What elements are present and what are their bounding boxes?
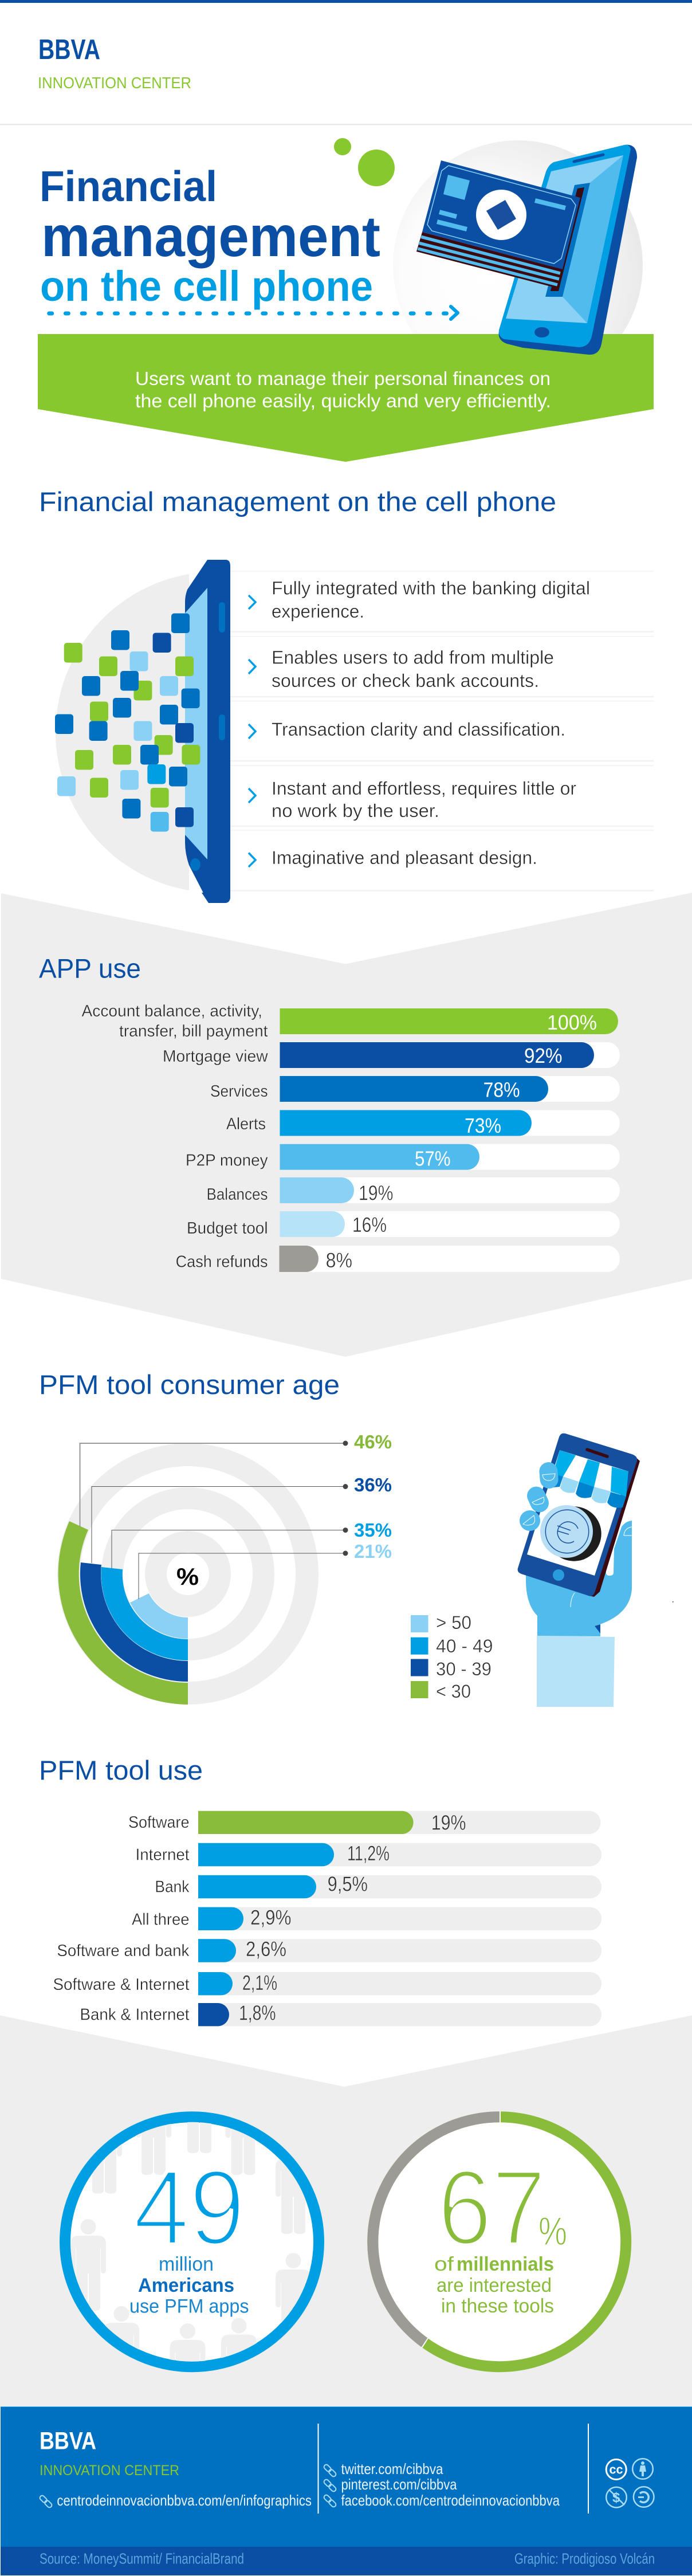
legend bbox=[411, 1612, 493, 1702]
bar: software bbox=[128, 1811, 601, 1835]
stat circle: 67 percent bbox=[373, 2111, 626, 2367]
bar: balances: Balances bbox=[206, 1185, 268, 1204]
arrow: dotted bbox=[49, 307, 458, 319]
caption bbox=[129, 2253, 249, 2317]
bar: cash refunds bbox=[176, 1246, 620, 1272]
callout: 36% bbox=[92, 1474, 392, 1563]
list item 1: Fully integrated with the banking digital bbox=[272, 578, 590, 598]
bar: software and bank: Software and bank bbox=[57, 1942, 190, 1960]
caption: are interested bbox=[437, 2275, 552, 2296]
panel: key stats bbox=[0, 2016, 692, 2415]
bar: alerts: 73% bbox=[465, 1114, 501, 1137]
footer background bbox=[1, 2407, 692, 2547]
bar: account balance: Account balance, activity, bbox=[81, 1002, 262, 1020]
callout: 46%: 46% bbox=[354, 1431, 392, 1452]
title: management bbox=[41, 205, 380, 269]
bar: bank: Bank bbox=[155, 1878, 190, 1896]
bar: bank and internet bbox=[80, 2001, 601, 2026]
bar: all three: All three bbox=[132, 1911, 189, 1929]
bar: software and bank: 2,6% bbox=[246, 1937, 286, 1961]
callout: 36%: 36% bbox=[354, 1474, 392, 1495]
bar: services: Services bbox=[210, 1082, 268, 1101]
bar chart: APP use bbox=[81, 1002, 620, 1272]
bar: budget tool: Budget tool bbox=[187, 1219, 268, 1238]
hero section bbox=[38, 138, 654, 462]
big number 49: 49 bbox=[133, 2149, 245, 2267]
logo: BBVA Innovation Center: BBVA bbox=[38, 34, 100, 65]
bar: balances bbox=[206, 1177, 620, 1205]
social links: facebook.com/centrodeinnovacionbbva bbox=[341, 2492, 560, 2509]
bar: bank and internet: Bank & Internet bbox=[80, 2006, 189, 2024]
bar: budget tool bbox=[187, 1211, 620, 1238]
banner: green arrow: Users want to manage their personal finances on bbox=[135, 368, 551, 389]
panel background bbox=[0, 2016, 692, 2407]
list item 2: Enables users to add from multiple bbox=[272, 647, 554, 668]
backdrop half circle bbox=[56, 574, 189, 890]
percent sign: % bbox=[538, 2209, 567, 2253]
caption: of bbox=[434, 2253, 454, 2275]
bar: services bbox=[210, 1076, 620, 1102]
top bar bbox=[0, 0, 692, 3]
footer logo: INNOVATION CENTER bbox=[40, 2463, 179, 2479]
list item 2: sources or check bank accounts. bbox=[272, 670, 539, 691]
icon: tablet side bbox=[185, 560, 230, 903]
panel: features bbox=[55, 560, 654, 903]
caption: use PFM apps bbox=[129, 2295, 249, 2317]
bar: software and bank bbox=[57, 1937, 601, 1962]
bar: software and internet bbox=[53, 1971, 601, 1995]
legend: < 30 bbox=[436, 1681, 471, 1702]
icons: creative commons licence: $ bbox=[612, 2490, 620, 2506]
bar: alerts bbox=[226, 1110, 620, 1137]
website link: centrodeinnovacionbbva.com/en/infographics bbox=[57, 2492, 312, 2509]
bar: software and internet: 2,1% bbox=[242, 1971, 277, 1994]
bar: account balance bbox=[81, 1002, 618, 1040]
source bar background bbox=[1, 2547, 692, 2575]
callout: 35% bbox=[112, 1519, 392, 1569]
list item 3: Transaction clarity and classification. bbox=[272, 719, 565, 740]
chart: concentric rings bbox=[58, 1431, 392, 1705]
logo: BBVA Innovation Center: INNOVATION CENTER bbox=[38, 74, 191, 92]
banner: green arrow bbox=[38, 334, 654, 462]
stat circle: 49 million bbox=[60, 2111, 324, 2372]
bar: budget tool: 16% bbox=[352, 1213, 387, 1236]
ring: under 30 bbox=[58, 1521, 188, 1705]
bar: P2P money: P2P money bbox=[186, 1152, 268, 1170]
icon: data squares bbox=[55, 613, 200, 832]
bar: bank: 9,5% bbox=[328, 1872, 368, 1896]
icon: phone with card bbox=[416, 145, 637, 355]
caption: in these tools bbox=[441, 2295, 554, 2317]
tablet tip overlapping panel bbox=[202, 893, 230, 903]
bar: services: 78% bbox=[483, 1078, 520, 1102]
caption: million bbox=[159, 2253, 214, 2275]
title: on the cell phone bbox=[40, 262, 373, 310]
bar: account balance: 100% bbox=[547, 1011, 597, 1034]
title bbox=[40, 162, 380, 310]
banner: green arrow: the cell phone easily, quickly and very efficiently. bbox=[135, 390, 551, 411]
people pattern bbox=[70, 2078, 311, 2415]
title: Financial bbox=[40, 162, 217, 210]
list item 2 bbox=[249, 647, 554, 691]
list item 4: no work by the user. bbox=[272, 800, 439, 821]
center percent sign: % bbox=[176, 1563, 199, 1590]
bar: cash refunds: 8% bbox=[326, 1248, 352, 1272]
icon: green dots bbox=[334, 138, 395, 186]
ring: 30 to 39 bbox=[80, 1562, 188, 1682]
bar: balances: 19% bbox=[359, 1181, 393, 1205]
social links bbox=[323, 2460, 560, 2509]
bar: account balance: transfer, bill payment bbox=[119, 1022, 268, 1040]
callout: 46% bbox=[80, 1431, 392, 1527]
bar: bank and internet: 1,8% bbox=[239, 2001, 276, 2025]
list item 1: experience. bbox=[272, 601, 364, 622]
panel: footer bbox=[1, 2406, 692, 2575]
caption: millennials bbox=[457, 2253, 554, 2275]
heading: PFM tool use: PFM tool use bbox=[39, 1756, 203, 1786]
caption: Americans bbox=[138, 2275, 234, 2296]
panel background bbox=[1, 893, 692, 1357]
social links: pinterest.com/cibbva bbox=[341, 2476, 457, 2493]
list item 4: Instant and effortless, requires little or bbox=[272, 778, 576, 799]
bar: mortgage view: Mortgage view bbox=[163, 1047, 269, 1066]
panel: APP use bbox=[1, 893, 692, 1357]
ring: over 50 bbox=[130, 1593, 188, 1639]
callout: 21%: 21% bbox=[354, 1541, 392, 1562]
bar: bank bbox=[155, 1872, 601, 1898]
bar: internet: 11,2% bbox=[347, 1841, 390, 1865]
legend: 30 - 39 bbox=[436, 1659, 492, 1679]
bar: software: Software bbox=[128, 1813, 189, 1832]
footer logo: BBVA bbox=[40, 2428, 96, 2455]
callout: 35%: 35% bbox=[354, 1519, 392, 1541]
hero backdrop circle bbox=[393, 140, 643, 390]
icons: creative commons licence bbox=[606, 2459, 654, 2508]
footer logo bbox=[40, 2428, 179, 2479]
bar: P2P money bbox=[186, 1144, 620, 1170]
list item 4 bbox=[249, 778, 576, 821]
bar: alerts: Alerts bbox=[226, 1115, 266, 1133]
bar: all three bbox=[132, 1906, 601, 1930]
bar: internet bbox=[135, 1841, 601, 1866]
icons: creative commons licence: cc bbox=[610, 2463, 623, 2476]
heading: financial management: Financial management on the cell phone bbox=[39, 487, 556, 517]
bar: software and internet: Software & Internet bbox=[53, 1976, 189, 1994]
legend: > 50 bbox=[436, 1612, 471, 1633]
social links: twitter.com/cibbva bbox=[341, 2460, 443, 2477]
bar: all three: 2,9% bbox=[250, 1906, 291, 1929]
callout: 21% bbox=[139, 1541, 392, 1599]
big number 67: 67 bbox=[438, 2149, 546, 2267]
list item 5: Imaginative and pleasant design. bbox=[272, 847, 537, 868]
caption bbox=[434, 2253, 554, 2317]
bar: mortgage view: 92% bbox=[524, 1044, 563, 1067]
bar: mortgage view bbox=[163, 1042, 620, 1068]
bar: internet: Internet bbox=[135, 1845, 189, 1864]
bar chart: PFM tool use bbox=[53, 1811, 601, 2026]
bar: cash refunds: Cash refunds bbox=[176, 1252, 268, 1271]
bar: software: 19% bbox=[431, 1811, 466, 1835]
ring: 40 to 49 bbox=[101, 1567, 188, 1660]
icon: hand holding phone with shop bbox=[518, 1434, 674, 1707]
bar: P2P money: 57% bbox=[415, 1147, 451, 1170]
graphic credit: Graphic: Prodigioso Volcán bbox=[514, 2550, 655, 2567]
heading: APP use: APP use bbox=[39, 953, 141, 984]
heading: PFM tool consumer age: PFM tool consumer age bbox=[39, 1370, 340, 1400]
legend: 40 - 49 bbox=[436, 1636, 493, 1656]
list item 1 bbox=[249, 578, 590, 622]
source credit: Source: MoneySummit/ FinancialBrand bbox=[40, 2550, 244, 2567]
grey rings bbox=[69, 1455, 307, 1693]
logo: BBVA Innovation Center bbox=[38, 34, 191, 92]
